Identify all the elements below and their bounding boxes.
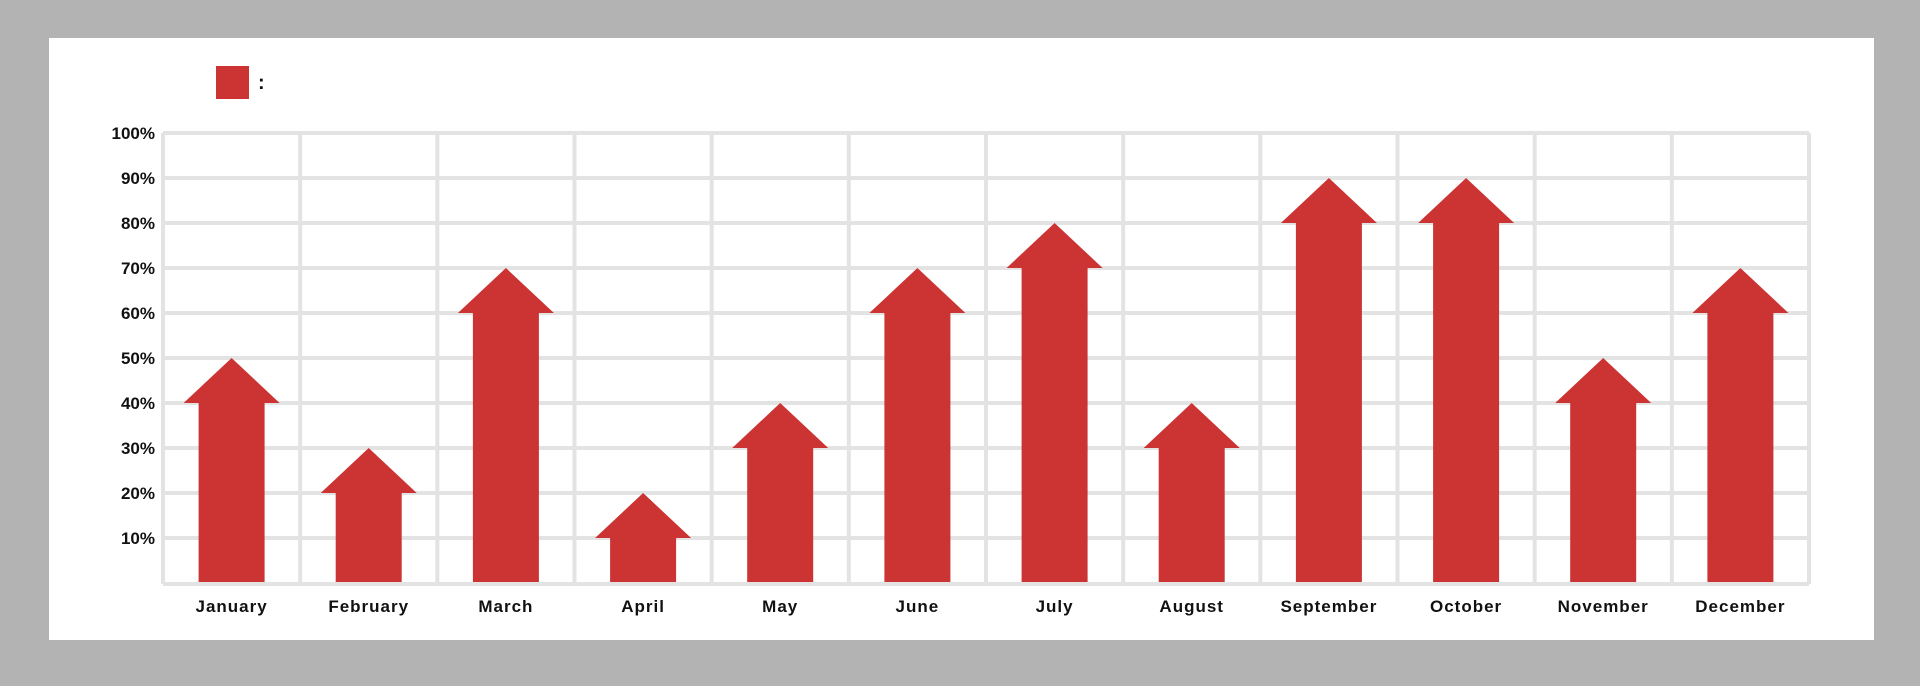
arrow: January 50%: [184, 358, 280, 582]
x-axis month labels: June: [896, 597, 939, 616]
x-axis month labels: February: [328, 597, 409, 616]
arrow: October 90%: [1418, 178, 1514, 582]
y-axis labels: 40%: [121, 394, 155, 413]
x-axis month labels: December: [1695, 597, 1786, 616]
arrow: November 50%: [1555, 358, 1651, 582]
x-axis month labels: April: [621, 597, 665, 616]
x-axis month labels: [195, 597, 1786, 616]
grid: [163, 133, 1809, 584]
arrow: December 70%: [1692, 268, 1788, 582]
arrow: August 40%: [1144, 403, 1240, 582]
y-axis labels: 90%: [121, 169, 155, 188]
arrow: February 30%: [321, 448, 417, 582]
y-axis labels: 50%: [121, 349, 155, 368]
y-axis labels: [112, 124, 155, 548]
arrow: May 40%: [732, 403, 828, 582]
y-axis labels: 70%: [121, 259, 155, 278]
y-axis labels: 10%: [121, 529, 155, 548]
y-axis labels: 60%: [121, 304, 155, 323]
y-axis labels: 30%: [121, 439, 155, 458]
arrow: June 70%: [869, 268, 965, 582]
arrow: March 70%: [458, 268, 554, 582]
arrow: April 20%: [595, 493, 691, 582]
y-axis labels: 20%: [121, 484, 155, 503]
x-axis month labels: March: [478, 597, 533, 616]
x-axis month labels: July: [1036, 597, 1074, 616]
x-axis month labels: May: [762, 597, 798, 616]
y-axis labels: 100%: [112, 124, 155, 143]
arrow: July 80%: [1007, 223, 1103, 582]
arrow: September 90%: [1281, 178, 1377, 582]
x-axis month labels: August: [1159, 597, 1224, 616]
legend: [216, 66, 265, 99]
y-axis labels: 80%: [121, 214, 155, 233]
legend: :: [258, 72, 265, 94]
x-axis month labels: January: [195, 597, 268, 616]
arrows chart: [184, 178, 1788, 582]
x-axis month labels: November: [1558, 597, 1649, 616]
x-axis month labels: October: [1430, 597, 1502, 616]
x-axis month labels: September: [1280, 597, 1377, 616]
